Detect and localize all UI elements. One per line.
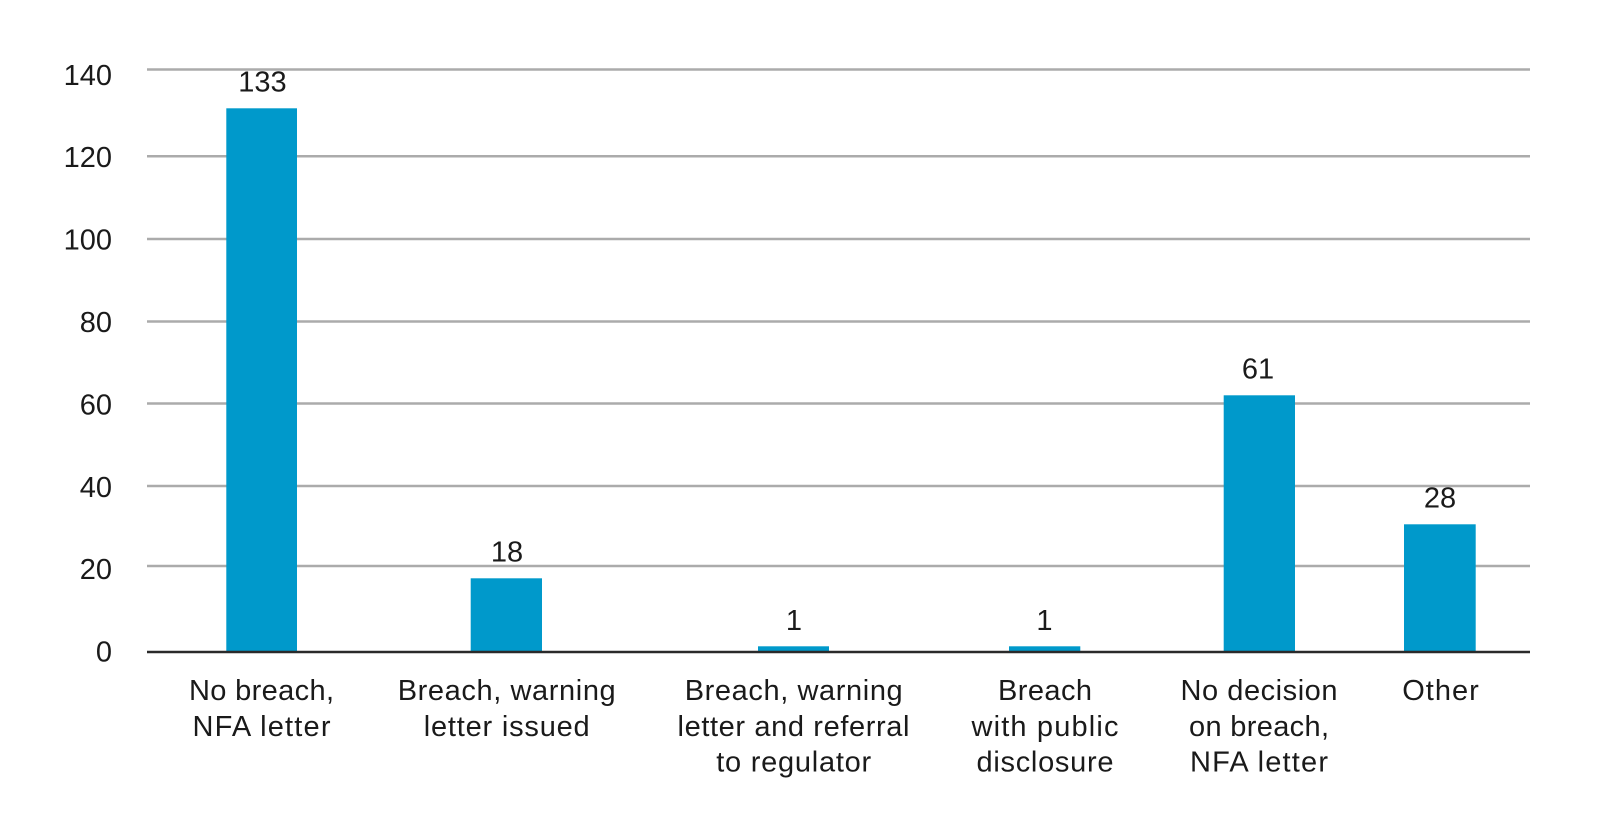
value labels [238,67,1456,637]
category labels: Breach, warning [398,675,616,707]
category labels: Breach [998,675,1092,707]
value labels: 1 [786,605,802,637]
y-axis labels: 80 [80,307,112,339]
category labels: letter issued [424,711,590,743]
category labels: NFA letter [1190,747,1328,779]
category labels: Breach, warning [685,675,903,707]
category labels: No breach, [189,675,334,707]
category labels: with public [970,711,1118,743]
bars [226,108,1476,652]
value labels: 133 [238,67,287,99]
value labels: 18 [491,537,523,569]
y-axis labels: 40 [80,472,112,504]
value labels: 1 [1036,605,1053,637]
y-axis labels: 100 [64,224,112,256]
value labels: 61 [1242,353,1274,385]
category labels: No decision [1180,675,1338,707]
y-axis labels [64,60,112,668]
value labels: 28 [1424,482,1456,514]
category labels: letter and referral [678,711,910,743]
x axis line [147,651,1530,653]
category labels: on breach, [1189,711,1329,743]
y-axis labels: 140 [64,60,112,92]
y-axis labels: 120 [64,142,112,174]
category labels: NFA letter [192,711,331,743]
y-axis labels: 60 [80,390,112,422]
y-axis labels: 20 [80,554,112,586]
y-axis labels: 0 [96,636,112,668]
category labels: disclosure [976,747,1114,779]
category labels: Other [1402,675,1479,707]
category labels: to regulator [716,747,872,779]
category labels [189,675,1479,779]
